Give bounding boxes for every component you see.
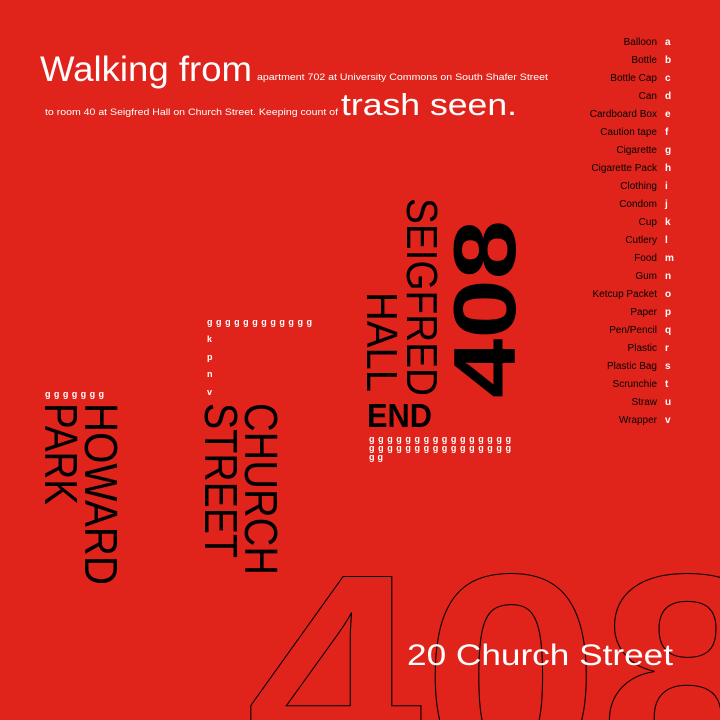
title: trash seen. bbox=[341, 87, 517, 122]
legend: j bbox=[664, 199, 668, 210]
label: Howard Park: HOWARD bbox=[75, 403, 127, 585]
legend: Ketcup Packet bbox=[593, 289, 657, 300]
legend: Caution tape bbox=[600, 127, 657, 138]
legend: g bbox=[665, 145, 671, 156]
legend: n bbox=[665, 271, 671, 282]
legend: e bbox=[665, 109, 671, 120]
title: apartment 702 at University Commons on South Shafer Street bbox=[257, 72, 548, 83]
label: Seigfred Hall: HALL bbox=[357, 292, 406, 392]
legend: i bbox=[665, 181, 668, 192]
legend: k bbox=[665, 217, 671, 228]
trash tally at end bbox=[369, 434, 511, 462]
legend: Bottle bbox=[631, 55, 657, 66]
bold 408 vertical: 408 bbox=[435, 220, 534, 398]
address: 20 Church Street bbox=[407, 639, 674, 672]
legend: c bbox=[665, 73, 671, 84]
legend: u bbox=[665, 397, 671, 408]
title: Walking from bbox=[40, 50, 252, 89]
legend: s bbox=[665, 361, 671, 372]
legend: r bbox=[665, 343, 669, 354]
legend: Clothing bbox=[620, 181, 657, 192]
trash tally at end: gggggggggggggggg bbox=[369, 434, 511, 444]
legend: Condom bbox=[619, 199, 657, 210]
title: to room 40 at Seigfred Hall on Church Street. Keeping count of bbox=[45, 107, 338, 118]
legend: Plastic Bag bbox=[607, 361, 657, 372]
legend: q bbox=[665, 325, 671, 336]
legend: Cup bbox=[639, 217, 657, 228]
legend bbox=[590, 37, 674, 426]
legend: Scrunchie bbox=[613, 379, 657, 390]
label: Church Street: CHURCH bbox=[235, 403, 287, 575]
label: Church Street: STREET bbox=[195, 403, 247, 558]
legend: Pen/Pencil bbox=[609, 325, 657, 336]
legend: Cigarette Pack bbox=[591, 163, 658, 174]
legend: f bbox=[665, 127, 669, 138]
legend: o bbox=[665, 289, 671, 300]
legend: v bbox=[665, 415, 671, 426]
legend: Plastic bbox=[628, 343, 657, 354]
legend: t bbox=[665, 379, 669, 390]
trash tally at Howard Park: ggggggg bbox=[45, 389, 104, 399]
legend: p bbox=[665, 307, 671, 318]
legend: Cutlery bbox=[625, 235, 657, 246]
trash tally on Church Street: gggggggggggg bbox=[207, 317, 312, 327]
trash tally on Church Street: p bbox=[207, 352, 213, 362]
legend: Bottle Cap bbox=[610, 73, 657, 84]
trash tally on Church Street bbox=[207, 317, 312, 397]
legend: l bbox=[665, 235, 668, 246]
legend: Wrapper bbox=[619, 415, 658, 426]
END label: END bbox=[367, 397, 432, 434]
trash tally on Church Street: n bbox=[207, 369, 212, 379]
label: Howard Park: PARK bbox=[35, 403, 87, 505]
trash tally on Church Street: k bbox=[207, 334, 213, 344]
legend: Balloon bbox=[624, 37, 657, 48]
title bbox=[40, 50, 548, 122]
label: Seigfred Hall bbox=[357, 198, 446, 396]
label: Howard Park bbox=[35, 403, 127, 585]
legend: m bbox=[665, 253, 674, 264]
legend: b bbox=[665, 55, 671, 66]
legend: Cigarette bbox=[616, 145, 657, 156]
label: Seigfred Hall: SEIGFRED bbox=[397, 198, 446, 396]
legend: h bbox=[665, 163, 671, 174]
trash tally at end: gg bbox=[369, 452, 383, 462]
trash tally on Church Street: v bbox=[207, 387, 212, 397]
legend: d bbox=[665, 91, 671, 102]
legend: Cardboard Box bbox=[590, 109, 657, 120]
label: Church Street bbox=[195, 403, 287, 575]
legend: Food bbox=[634, 253, 657, 264]
legend: Can bbox=[639, 91, 657, 102]
legend: a bbox=[665, 37, 671, 48]
legend: Straw bbox=[631, 397, 658, 408]
trash tally at end: gggggggggggggggg bbox=[369, 443, 511, 453]
legend: Gum bbox=[635, 271, 657, 282]
legend: Paper bbox=[630, 307, 658, 318]
